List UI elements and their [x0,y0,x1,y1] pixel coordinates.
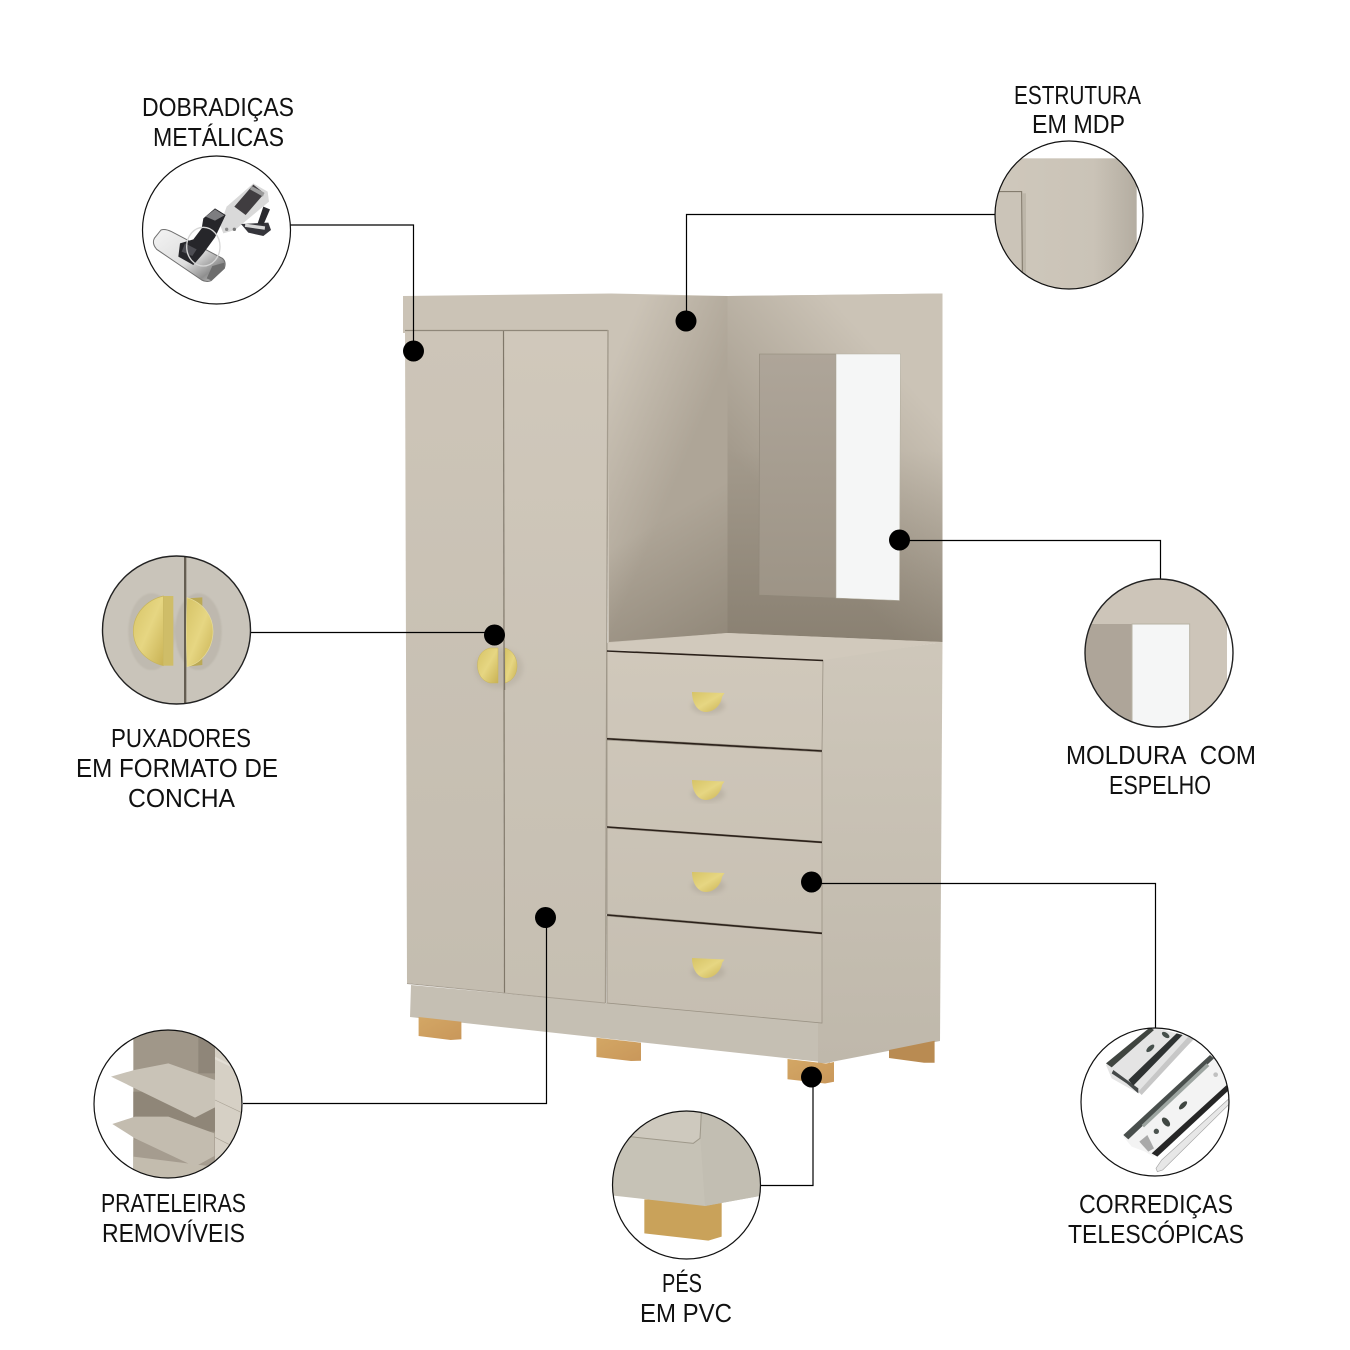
niche left wall [609,296,728,642]
label: prateleiras removíveis [101,1188,246,1248]
detail: removable shelves [94,1027,245,1180]
label: prateleiras removíveis: PRATELEIRAS [101,1188,246,1218]
label: estrutura em MDP: ESTRUTURA [1014,80,1142,110]
marker dots [403,310,910,1088]
label: estrutura em MDP [1014,80,1142,139]
door gaps [405,330,608,1003]
niche right wall [728,294,942,642]
drawer handles [691,692,725,980]
right door [504,331,608,1003]
left door [405,331,504,993]
label: puxadores em formato de concha: EM FORMATO DE [76,753,278,783]
label: corrediças telescópicas: CORREDIÇAS [1079,1189,1233,1219]
cabinet side [818,642,942,1063]
label: dobradiças metálicas: METÁLICAS [153,122,284,152]
label: moldura com espelho: ESPELHO [1109,770,1211,800]
label: puxadores em formato de concha [76,723,278,813]
back panel and top board [403,294,942,643]
door handles [475,640,523,690]
label: prateleiras removíveis: REMOVÍVEIS [102,1218,245,1248]
label: moldura com espelho [1066,740,1256,800]
detail: MDP structure [992,141,1143,293]
detail: telescopic slides [1081,1027,1230,1176]
label: pés em PVC: EM PVC [640,1298,732,1328]
label: pés em PVC: PÉS [662,1268,702,1298]
drawer fronts [607,651,823,1023]
leader lines [243,214,1160,1186]
niche right wall shading [728,450,942,642]
niche left wall shading [609,450,728,642]
label: puxadores em formato de concha: CONCHA [128,783,236,813]
label: corrediças telescópicas: TELESCÓPICAS [1068,1219,1244,1249]
wooden feet [419,1017,935,1084]
detail: shell handles [102,553,250,710]
label: dobradiças metálicas: DOBRADIÇAS [142,92,294,122]
drawer gaps [607,651,823,933]
label: corrediças telescópicas [1068,1189,1244,1249]
detail: mirror frame [1084,577,1233,731]
mirror [759,354,900,600]
plinth [410,985,830,1063]
label: moldura com espelho: MOLDURA COM [1066,740,1256,770]
label: puxadores em formato de concha: PUXADORES [111,723,251,753]
label: dobradiças metálicas [142,92,294,152]
detail: metal hinge [142,156,290,304]
label: estrutura em MDP: EM MDP [1032,109,1125,139]
detail: PVC feet [608,1108,765,1259]
counter top [606,633,942,660]
furniture: wardrobe with mirror and drawers [403,294,942,1084]
label: pés em PVC [640,1268,732,1328]
